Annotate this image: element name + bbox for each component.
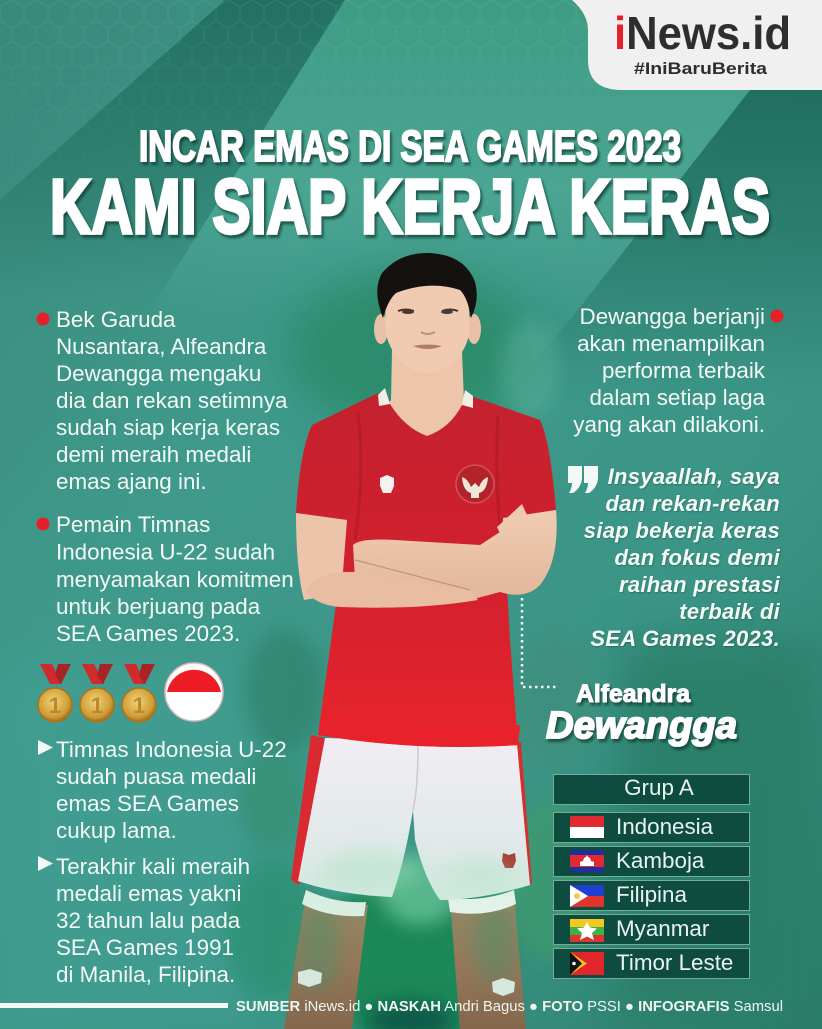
left text: bullet 1: emas ajang ini. [56,469,207,494]
crossed arms [296,504,557,608]
right text block [573,304,784,437]
quote text: dan rekan-rekan [606,491,780,516]
head [374,253,481,373]
left text: bullet 1: sudah siap kerja keras [56,415,280,440]
left text: bullet 4: 32 tahun lalu pada [56,908,241,933]
left text: bullet 1 [36,307,288,494]
green smoke behind player [225,270,600,1029]
left text: bullet 1: Nusantara, Alfeandra [56,334,267,359]
quote mark [568,466,598,493]
left text: bullet 4: di Manila, Filipina. [56,962,235,987]
row: Kamboja [554,846,750,876]
left text: bullet 2: untuk berjuang pada [56,594,261,619]
left text: bullet 1: demi meraih medali [56,442,251,467]
left text: bullet 3 [38,737,287,843]
title [50,122,770,250]
row: Timor Leste: Timor Leste [616,950,733,975]
right text block: dalam setiap laga [589,385,766,410]
jersey [296,388,556,747]
left text: bullet 4: Terakhir kali meraih [56,854,250,879]
row: Indonesia: Indonesia [616,814,714,839]
logo wordmark: iNews.id [614,7,791,59]
left text: bullet 4: medali emas yakni [56,881,241,906]
left text: bullet 1: Dewangga mengaku [56,361,261,386]
left text: bullet 4 [38,854,250,987]
row: Timor Leste [554,948,750,978]
quote text: terbaik di [679,599,781,624]
row: Kamboja: Kamboja [616,848,705,873]
quote text: SEA Games 2023. [590,626,780,651]
right text block: yang akan dilakoni. [573,412,765,437]
left text: bullet 1: Bek Garuda [56,307,176,332]
left text: bullet 2: SEA Games 2023. [56,621,240,646]
left text: bullet 2: Pemain Timnas [56,512,210,537]
left text: bullet 1: dia dan rekan setimnya [56,388,288,413]
footer rule [0,1003,228,1008]
player name: Alfeandra [576,680,691,708]
neck [378,350,475,437]
right text block: akan menampilkan [577,331,765,356]
right text block: performa terbaik [602,358,766,383]
quote text: siap bekerja keras [584,518,780,543]
group header: Grup A [624,775,694,800]
left text: bullet 3: Timnas Indonesia U-22 [56,737,287,762]
quote text [584,464,781,651]
logo panel [572,0,822,90]
quote text: dan fokus demi [614,545,781,570]
right text block: Dewangga berjanji [580,304,765,329]
group header [554,774,750,804]
shorts [291,735,532,900]
left text: bullet 3: sudah puasa medali [56,764,256,789]
left text: bullet 2 [36,512,294,646]
quote text: raihan prestasi [619,572,781,597]
gold medals [38,664,156,722]
round Indonesian flag [165,663,223,721]
player name: Dewangga [546,705,737,747]
footer credits: SUMBER iNews.id ● NASKAH Andri Bagus ● FOTO PSSI ● INFOGRAFIS Samsul [236,999,783,1015]
left text: bullet 2: menyamakan komitmen [56,567,294,592]
row: Indonesia [554,812,750,842]
gold medals: 1 [91,693,103,718]
player photo illustration [284,253,557,1029]
row: Filipina: Filipina [616,882,687,907]
left text: bullet 4: SEA Games 1991 [56,935,234,960]
legs [284,890,526,1029]
quote text: Insyaallah, saya [608,464,780,489]
left text: bullet 3: emas SEA Games [56,791,239,816]
row: Myanmar [554,914,750,944]
group table [554,774,750,978]
logo tagline: #IniBaruBerita [634,59,768,78]
left text: bullet 2: Indonesia U-22 sudah [56,540,275,564]
left text: bullet 3: cukup lama. [56,818,177,843]
dotted connector [522,598,558,687]
gold medals: 1 [133,693,145,718]
row: Myanmar: Myanmar [616,916,710,941]
player name [546,680,737,747]
gold medals: 1 [49,693,61,718]
row: Filipina [554,880,750,910]
